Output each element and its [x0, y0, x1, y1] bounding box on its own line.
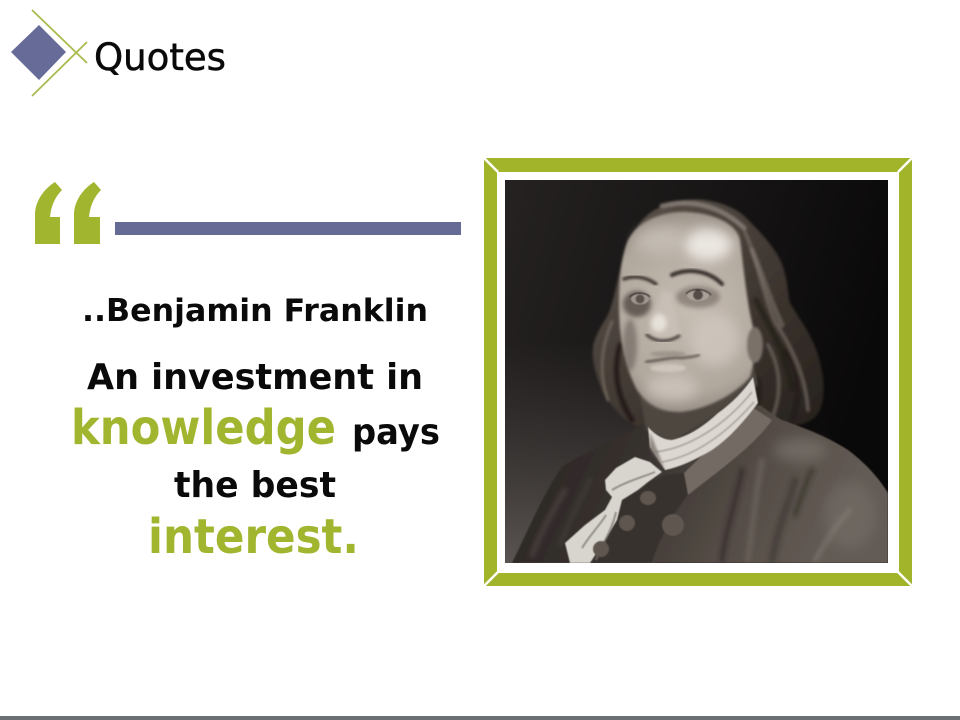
quote text: interest.: [148, 509, 359, 565]
picture frame: [484, 158, 912, 586]
quote text: An investment in: [87, 357, 423, 398]
waistcoat buttons: [593, 491, 684, 557]
face: [619, 212, 763, 412]
quote text: pays: [352, 412, 440, 453]
right eye socket: [676, 286, 720, 308]
nose: [647, 290, 680, 341]
icon: opening quotation mark: [35, 182, 101, 244]
white neck stock: [648, 377, 758, 470]
footer rule: [0, 716, 960, 720]
left eye: [630, 293, 650, 304]
coat: [512, 405, 888, 563]
waistcoat: [600, 473, 688, 563]
forehead highlight: [684, 229, 732, 261]
mouth: [646, 351, 699, 372]
cheek shading: [691, 314, 739, 366]
ear: [747, 327, 763, 363]
shirt ruffle: [565, 457, 662, 563]
quote divider bar: [115, 222, 461, 235]
portrait background: [505, 180, 888, 563]
neck: [640, 360, 758, 442]
icon: title diamond with crossed lines: [11, 10, 87, 96]
coat collar: [684, 407, 772, 495]
portrait: Benjamin Franklin: [505, 180, 888, 563]
quote text: the best: [174, 465, 336, 506]
hair: [593, 200, 824, 430]
eyebrows: [624, 277, 656, 284]
quote text: [71, 357, 440, 565]
quote text: knowledge: [71, 400, 336, 456]
right eye: [686, 289, 711, 301]
quote attribution: ..Benjamin Franklin: [82, 293, 428, 329]
title: Quotes: [94, 36, 226, 79]
left eye socket: [623, 291, 651, 317]
